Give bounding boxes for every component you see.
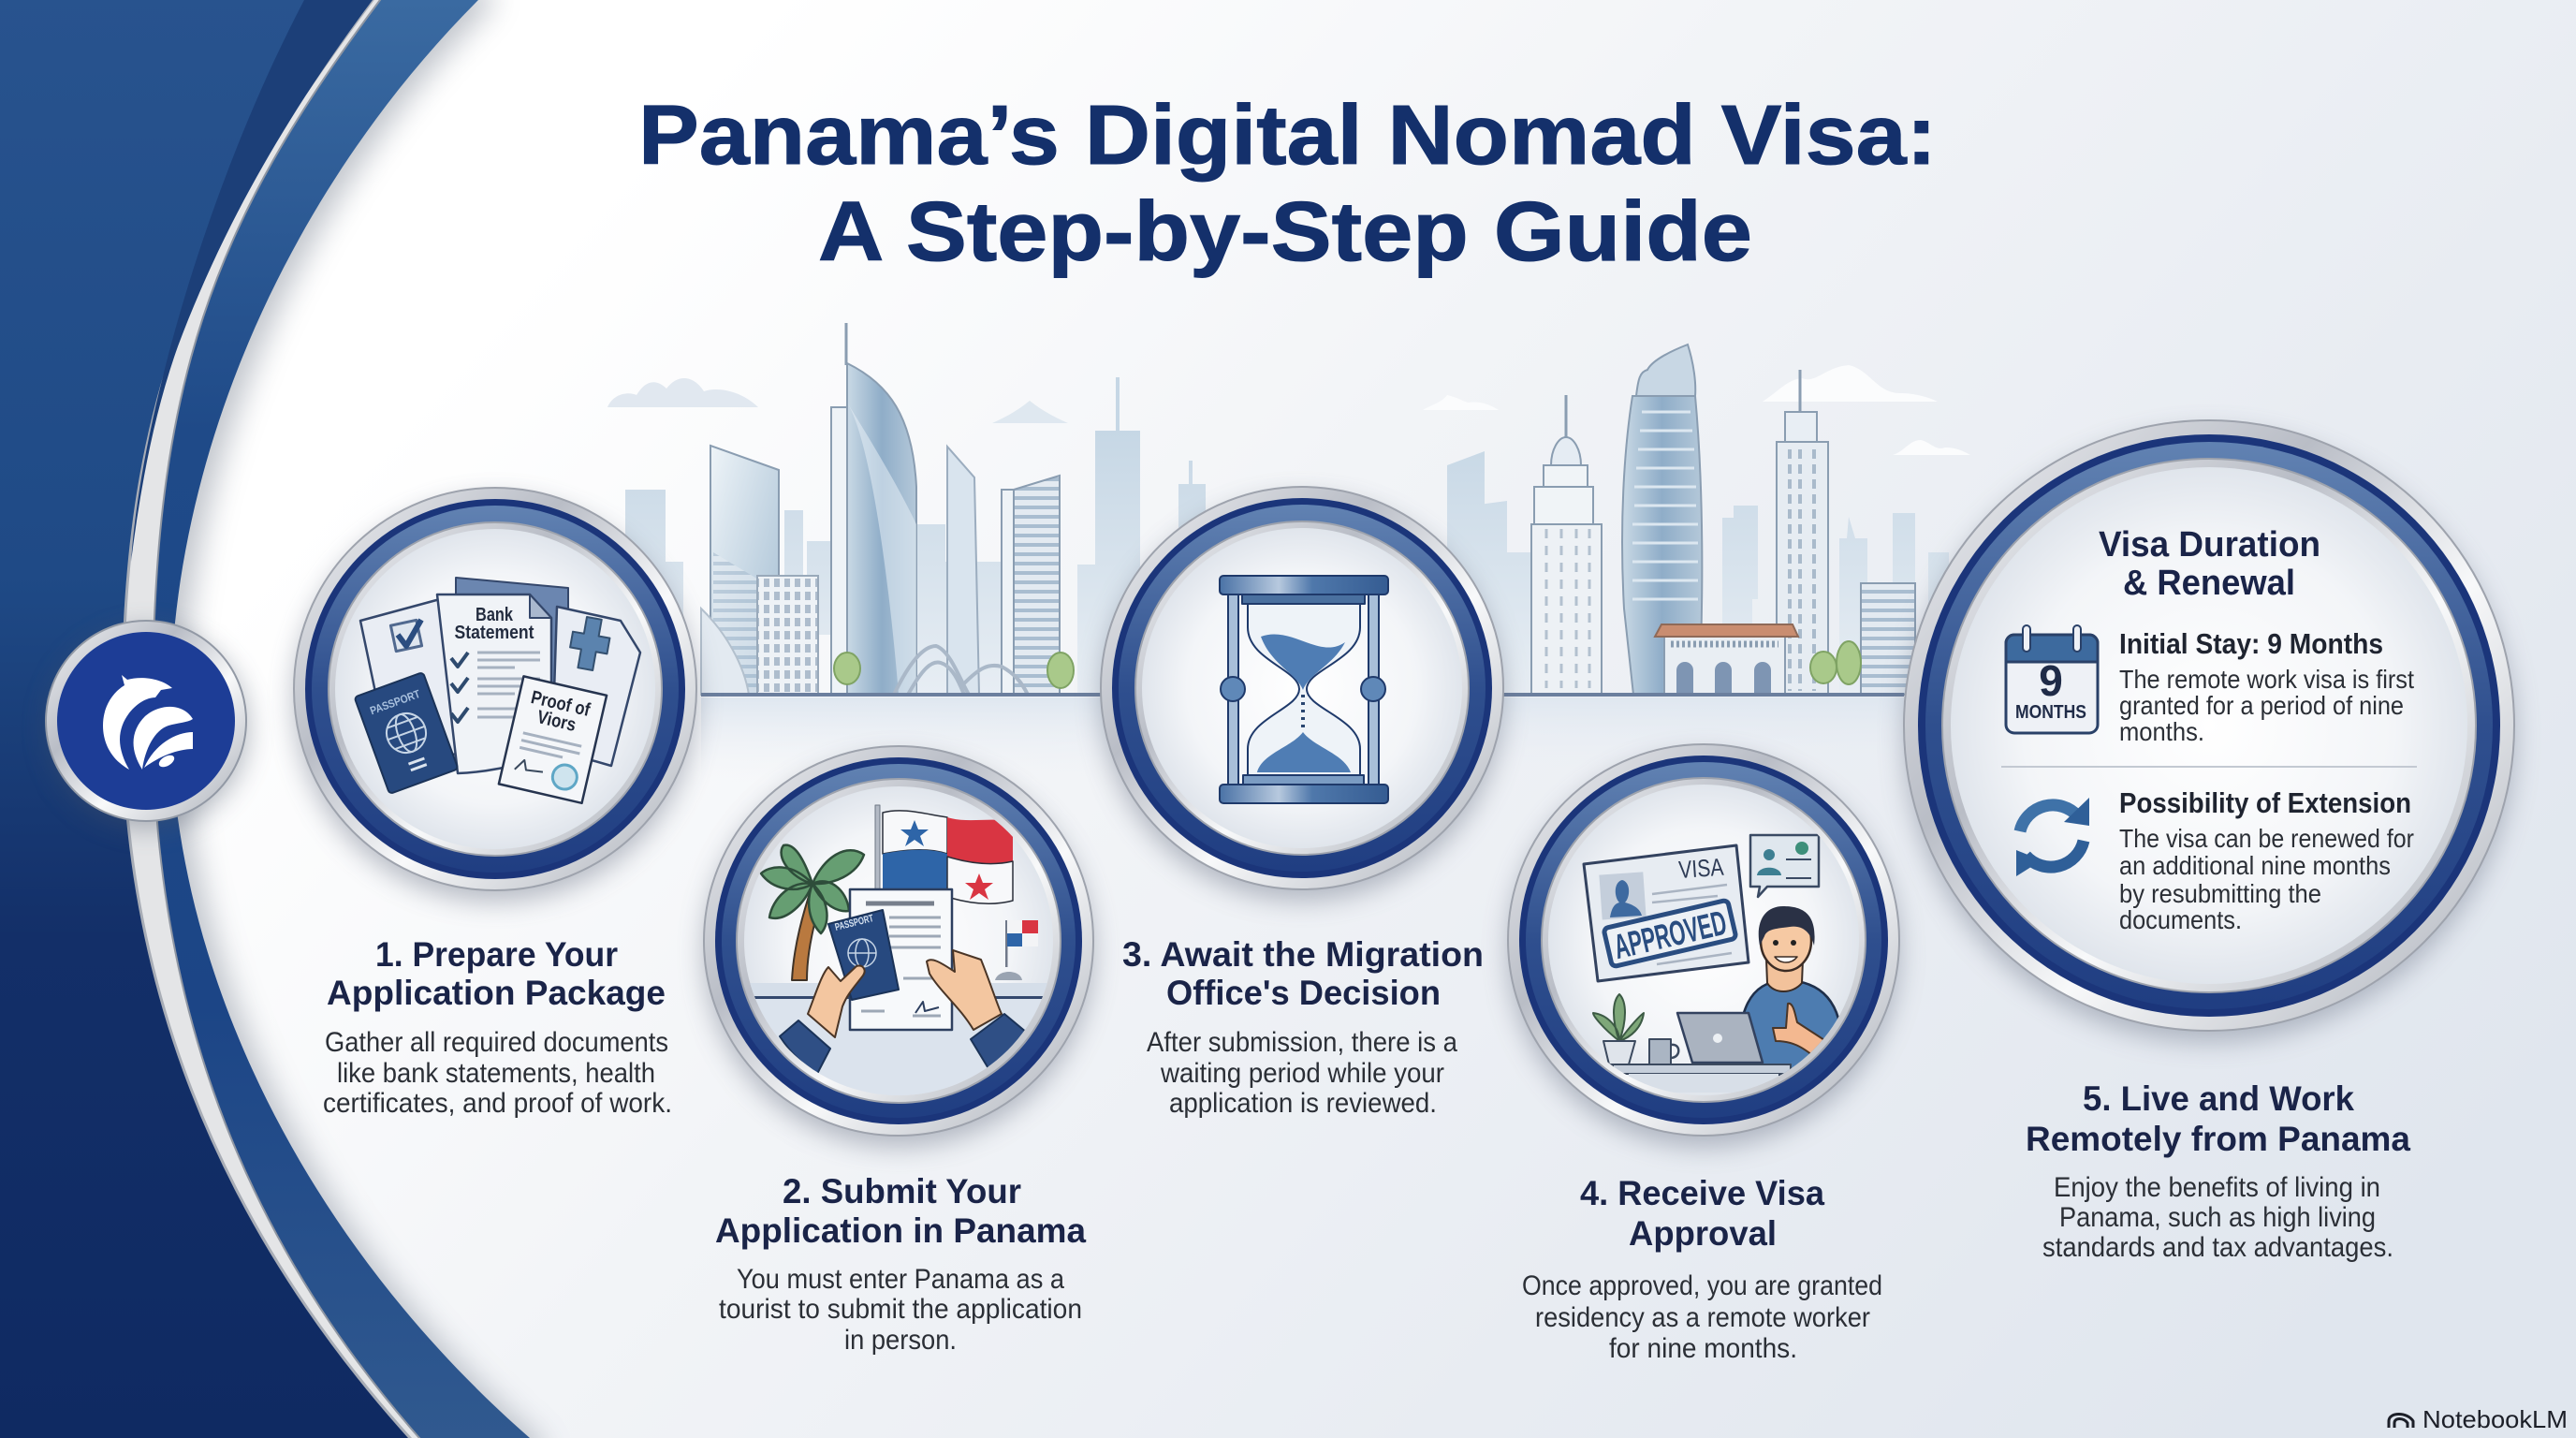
title: A Step-by-Step Guide [818, 185, 1752, 279]
step 4 text: Approval [1629, 1214, 1777, 1253]
right tall tower [1777, 370, 1828, 695]
step 3 text: application is reviewed. [1169, 1088, 1437, 1119]
initial stay text: granted for a period of nine [2119, 691, 2404, 720]
arched bridge [894, 646, 1028, 695]
tall sail tower [831, 323, 916, 695]
step 5 text: Enjoy the benefits of living in [2054, 1172, 2380, 1203]
proof of work sheet: Viors [535, 707, 578, 736]
water reflection [701, 697, 1904, 782]
icon: medical cross [569, 616, 610, 671]
NotebookLM watermark: NotebookLM [2422, 1405, 2568, 1433]
icon: right hand [927, 950, 1002, 1030]
skyline illustration [607, 323, 1970, 782]
step 2 text [715, 1172, 1086, 1356]
heritage building [1655, 624, 1798, 695]
spired white tower [1531, 395, 1602, 695]
faint background buildings [625, 377, 1949, 696]
step 4 circle [1508, 744, 1899, 1147]
left navy swoosh [0, 0, 543, 1438]
icon: visa card: VISA [1677, 853, 1725, 884]
step 4 text: 4. Receive Visa [1580, 1174, 1824, 1212]
step 5 text: standards and tax advantages. [2042, 1232, 2393, 1263]
step 3 text: waiting period while your [1160, 1058, 1444, 1089]
icon: man with thumbs up [1736, 906, 1842, 1075]
possibility of extension text [2119, 786, 2414, 934]
step 1 text: Gather all required documents [325, 1027, 668, 1058]
icon: video chat bubble [1750, 835, 1819, 897]
icon: calendar 9 months [2006, 625, 2098, 733]
step 1 text: 1. Prepare Your [375, 935, 618, 974]
initial stay text: months. [2119, 717, 2204, 746]
step 5 text [2026, 1079, 2410, 1263]
icon: renewal arrows [2016, 798, 2089, 876]
bank statement sheet [437, 594, 551, 773]
horizon line [701, 693, 1904, 697]
panel heading [2099, 525, 2320, 603]
step 1 text: certificates, and proof of work. [323, 1088, 672, 1119]
navy panel [0, 0, 419, 1438]
step 5 circle: visa duration and renewal [1904, 420, 2514, 1042]
icon: coffee mug [1649, 1039, 1678, 1064]
window block [757, 576, 818, 695]
big curved tower [1622, 345, 1702, 695]
darker strip [131, 0, 373, 562]
step 2 text: 2. Submit Your [783, 1172, 1021, 1211]
bank statement sheet: Statement [455, 623, 534, 643]
icon: application form [850, 889, 952, 1030]
initial stay text: Initial Stay: 9 Months [2119, 627, 2383, 660]
icon: calendar 9 months: 9 [2039, 656, 2063, 705]
possibility of extension text: The visa can be renewed for [2119, 824, 2414, 853]
icon: palm tree [761, 845, 864, 980]
frame [1220, 576, 1388, 803]
icon: passport in hand [808, 910, 899, 1037]
glass tower centre [947, 447, 979, 695]
glass bulbs [1248, 604, 1360, 775]
step 4 text: residency as a remote worker [1535, 1302, 1870, 1333]
step 3 text: 3. Await the Migration [1122, 935, 1484, 974]
step 1 circle [294, 488, 696, 902]
proof of work sheet: Proof of [529, 687, 593, 721]
icon: suit cuffs [780, 1014, 1027, 1074]
icon: checkbox [390, 620, 422, 652]
step 3 text: Office's Decision [1166, 974, 1441, 1012]
icon: Panama flag [875, 805, 1013, 903]
glass dome [701, 609, 749, 695]
icon: laptop [1677, 1013, 1763, 1063]
step 4 text: Once approved, you are granted [1522, 1270, 1882, 1301]
step 4 text [1522, 1174, 1882, 1364]
clouds [607, 365, 1970, 455]
approved stamp: APPROVED [1610, 903, 1730, 966]
trees [834, 641, 1861, 688]
bank statement sheet: Bank [476, 605, 514, 625]
icon: hourglass [1220, 576, 1388, 803]
icon: plant [1593, 994, 1644, 1064]
approved stamp [1603, 900, 1736, 968]
icon: passport in hand: PASSPORT [834, 913, 875, 933]
icon: document pile [355, 578, 640, 803]
step 1 text: like bank statements, health [337, 1058, 655, 1089]
icon: dolphin mark [103, 675, 193, 770]
right striped building [1861, 583, 1915, 695]
possibility of extension text: an additional nine months [2119, 851, 2391, 880]
step 1 text: Application Package [327, 974, 666, 1012]
possibility of extension text: by resubmitting the [2119, 879, 2321, 908]
icon: counter [751, 983, 1046, 1088]
title: Panama’s Digital Nomad Visa: [638, 89, 1937, 183]
step 2 text: You must enter Panama as a [737, 1264, 1064, 1295]
striped tower [1002, 476, 1060, 695]
step 5 text: Remotely from Panama [2026, 1120, 2410, 1158]
panel heading: & Renewal [2123, 564, 2295, 603]
possibility of extension text: Possibility of Extension [2119, 786, 2411, 819]
glass tower left [710, 446, 779, 695]
step 5 text: 5. Live and Work [2083, 1079, 2354, 1118]
sand [1257, 635, 1351, 772]
step 1 text [323, 935, 672, 1119]
icon: desk [1613, 1064, 1791, 1093]
icon: calendar 9 months: MONTHS [2015, 702, 2086, 723]
step 3 circle [1101, 487, 1503, 901]
blue outer band [0, 0, 530, 1438]
title [638, 89, 1937, 279]
initial stay text [2119, 627, 2414, 746]
step 3 text [1122, 935, 1484, 1119]
step 4 text: for nine months. [1609, 1333, 1797, 1364]
icon: visa card [1584, 845, 1749, 981]
step 2 text: tourist to submit the application [719, 1294, 1082, 1325]
panel heading: Visa Duration [2099, 525, 2320, 565]
possibility of extension text: documents. [2119, 905, 2242, 934]
icon: small flag [995, 920, 1038, 980]
silver stripe [0, 0, 429, 1438]
proof of work sheet [499, 676, 607, 803]
passport: PASSPORT [368, 687, 422, 717]
step 2 text: in person. [844, 1325, 957, 1356]
logo badge [46, 621, 248, 829]
step 3 text: After submission, there is a [1147, 1027, 1457, 1058]
step 2 text: Application in Panama [715, 1211, 1086, 1250]
initial stay text: The remote work visa is first [2119, 665, 2414, 694]
step 2 circle [704, 746, 1093, 1147]
step 5 text: Panama, such as high living [2059, 1202, 2376, 1233]
passport [355, 672, 458, 794]
